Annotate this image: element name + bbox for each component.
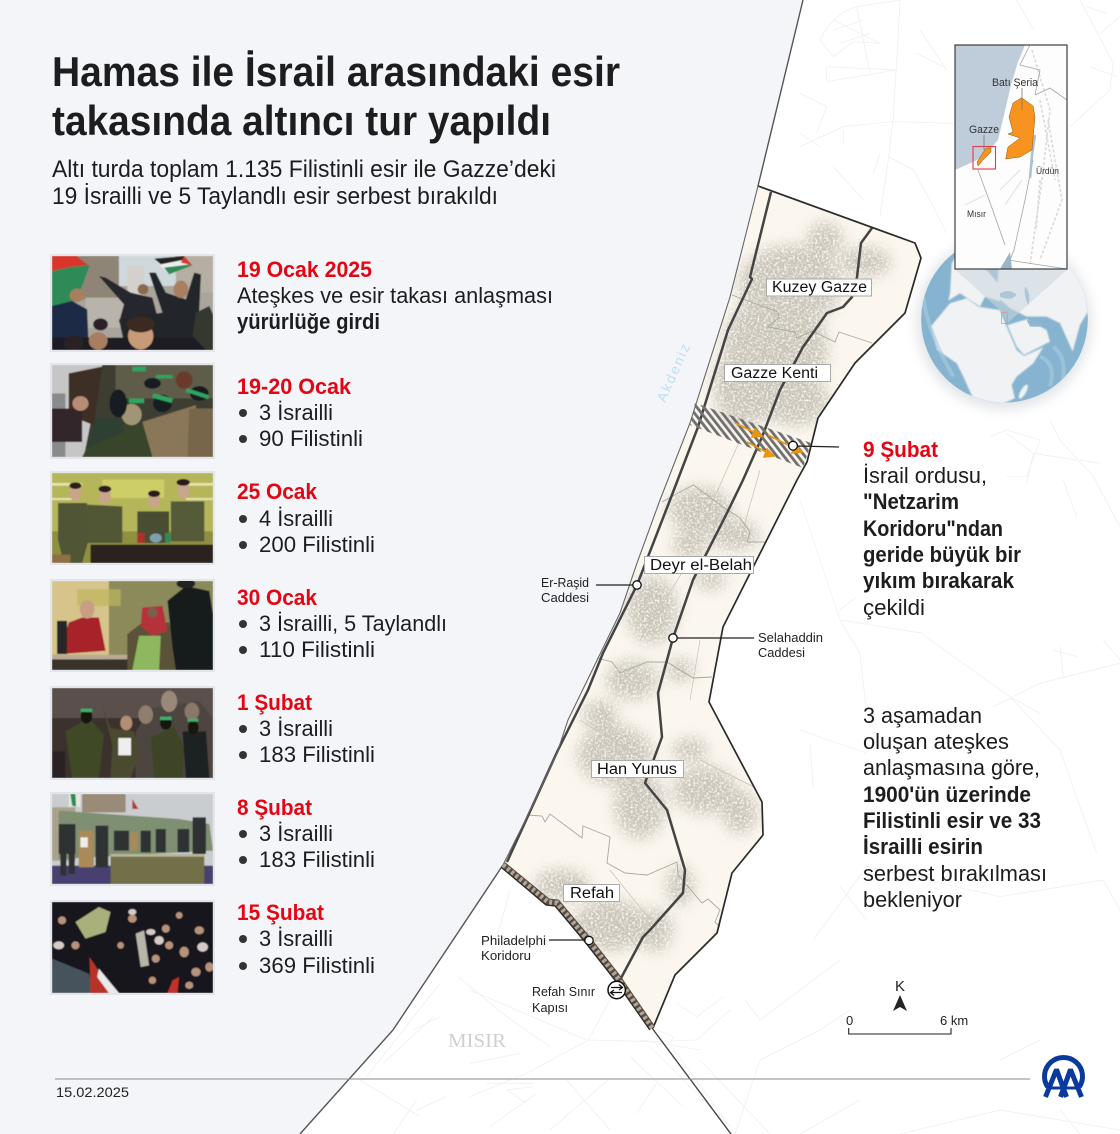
timeline: text 8 Şubat: 183 Filistinli [259, 847, 375, 872]
timeline: text 15 Şubat: 3 İsrailli [259, 926, 333, 951]
timeline: text 19-20 Ocak: 90 Filistinli [259, 426, 363, 451]
inset labels: Gazze [969, 124, 999, 136]
footer rule [55, 1078, 1030, 1080]
inset Gaza [977, 148, 991, 166]
timeline: text 19-20 Ocak: 3 İsrailli [259, 400, 333, 425]
background road network [360, 0, 1120, 1134]
scale bar: 0 [846, 1013, 853, 1028]
timeline: text 19 Ocak 2025: Ateşkes ve esir takası anlaşması [237, 283, 553, 308]
globe locator [917, 235, 1091, 409]
timeline: text 19 Ocak 2025 [237, 257, 553, 334]
scale bar [846, 1013, 968, 1034]
timeline: photo 1 Şubat [50, 686, 215, 780]
timeline: photo 19 Ocak [50, 254, 215, 352]
timeline: text 15 Şubat: 369 Filistinli [259, 953, 375, 978]
timeline: text 19-20 Ocak [237, 374, 363, 451]
timeline: photo 19-20 Ocak [50, 363, 215, 459]
inset labels: Ürdün [1036, 166, 1059, 176]
inset map [955, 45, 1067, 269]
timeline: text 15 Şubat [237, 900, 375, 978]
text block: agreement: bekleniyor [863, 887, 962, 912]
title: Hamas ile İsrail arasındaki esir [52, 48, 620, 95]
text block: agreement: 3 aşamadan [863, 703, 982, 728]
subtitle: Altı turda toplam 1.135 Filistinli esir ile Gazze’deki [52, 156, 556, 183]
callout: Er-Raşid Caddesi [541, 575, 641, 605]
timeline: text 19-20 Ocak: 19-20 Ocak [237, 374, 352, 399]
title: takasında altıncı tur yapıldı [52, 97, 551, 144]
callout: Er-Raşid Caddesi: Caddesi [541, 590, 589, 605]
text block: 9 Şubat: Koridoru"ndan [863, 516, 1003, 541]
callout: Selahaddin Caddesi: Selahaddin [758, 630, 823, 645]
subtitle: 19 İsrailli ve 5 Taylandlı esir serbest bırakıldı [52, 183, 498, 210]
timeline: text 1 Şubat: 3 İsrailli [259, 716, 333, 741]
text block: 9 Şubat: çekildi [863, 595, 925, 620]
timeline: text 15 Şubat: 15 Şubat [237, 900, 325, 925]
timeline: text 30 Ocak: 3 İsrailli, 5 Taylandlı [259, 611, 447, 636]
text block: agreement [863, 703, 1047, 912]
subtitle [52, 156, 556, 210]
callout: Selahaddin Caddesi [669, 630, 823, 660]
inset labels [967, 77, 1059, 219]
label: MISIR: MISIR [448, 1030, 507, 1052]
text block: agreement: 1900'ün üzerinde [863, 782, 1031, 807]
callout: Philadelphi Koridoru [481, 933, 593, 963]
scale bar: 6 km [940, 1013, 968, 1028]
timeline: text 25 Ocak [237, 479, 375, 557]
Selahaddin road [620, 228, 872, 980]
map label: Kuzey Gazze: Kuzey Gazze [772, 279, 867, 296]
north arrow: K [895, 978, 905, 995]
timeline: text 30 Ocak [237, 585, 447, 662]
timeline: text 30 Ocak: 110 Filistinli [259, 637, 375, 662]
text block: agreement: Filistinli esir ve 33 [863, 808, 1041, 833]
inset sea [955, 45, 1025, 170]
inset labels: Mısır [967, 209, 986, 219]
text block: 9 Şubat [863, 437, 1021, 620]
map: Gaza Strip [501, 186, 921, 1134]
timeline: text 25 Ocak: 25 Ocak [237, 479, 318, 504]
icon: border crossing [608, 981, 625, 999]
timeline: photo 25 Ocak [50, 471, 215, 565]
text block: 9 Şubat: yıkım bırakarak [863, 568, 1015, 593]
title [52, 48, 620, 144]
date: 15.02.2025 [56, 1084, 129, 1100]
text block: 9 Şubat: İsrail ordusu, [863, 463, 987, 488]
map label: Refah: Refah [570, 885, 614, 902]
timeline: text 1 Şubat [237, 690, 375, 767]
sea area and Egyptian coastline [0, 0, 803, 1134]
inset West Bank [1006, 98, 1035, 159]
label: Akdeniz: Akdeniz [653, 339, 694, 404]
timeline: photo 8 Şubat [50, 792, 215, 886]
callout: Philadelphi Koridoru: Philadelphi [481, 933, 546, 948]
callout: Selahaddin Caddesi: Caddesi [758, 645, 805, 660]
globe land [922, 257, 1088, 402]
text block: 9 Şubat: geride büyük bir [863, 542, 1021, 567]
callout: Refah Sınır Kapısı: Kapısı [532, 1000, 568, 1015]
Er-Raşid road [507, 192, 771, 862]
timeline: text 8 Şubat [237, 795, 375, 872]
callout: Er-Raşid Caddesi: Er-Raşid [541, 575, 589, 590]
logo: AA [1045, 1057, 1082, 1097]
text block: 9 Şubat: 9 Şubat [863, 437, 939, 462]
timeline: text 8 Şubat: 3 İsrailli [259, 821, 333, 846]
text block: agreement: anlaşmasına göre, [863, 755, 1040, 780]
timeline: photo 15 Şubat [50, 900, 215, 995]
text block: agreement: oluşan ateşkes [863, 729, 1009, 754]
Philadelphi corridor [501, 865, 652, 1030]
Egypt-Israel border line [652, 1028, 731, 1134]
timeline: text 30 Ocak: 30 Ocak [237, 585, 318, 610]
callout: Refah Sınır Kapısı [532, 984, 596, 1015]
timeline: text 1 Şubat: 183 Filistinli [259, 742, 375, 767]
orange arrows: withdrawal [735, 423, 802, 457]
urban areas [534, 222, 891, 952]
governorate boundaries [528, 295, 872, 927]
timeline: text 19 Ocak 2025: yürürlüğe girdi [237, 309, 380, 334]
north arrow [893, 978, 907, 1011]
text block: 9 Şubat: "Netzarim [863, 489, 959, 514]
map label: Deyr el-Belah: Deyr el-Belah [650, 557, 752, 574]
map label: Han Yunus: Han Yunus [597, 761, 677, 778]
inset labels: Batı Şeria [992, 77, 1039, 89]
strip land area [503, 186, 921, 1028]
view wedge [955, 269, 1068, 323]
strip outline [653, 186, 921, 1028]
timeline: text 19 Ocak 2025: 19 Ocak 2025 [237, 257, 372, 282]
Netzarim corridor hatching [690, 403, 811, 468]
timeline: text 1 Şubat: 1 Şubat [237, 690, 313, 715]
map label: Gazze Kenti: Gazze Kenti [731, 365, 818, 382]
timeline: text 25 Ocak: 4 İsrailli [259, 506, 333, 531]
timeline: photo 30 Ocak [50, 579, 215, 672]
callout line: Netzarim [789, 441, 839, 450]
text block: agreement: serbest bırakılması [863, 861, 1047, 886]
callout: Refah Sınır Kapısı: Refah Sınır [532, 984, 596, 999]
callout: Philadelphi Koridoru: Koridoru [481, 948, 531, 963]
timeline: text 8 Şubat: 8 Şubat [237, 795, 313, 820]
text block: agreement: İsrailli esirin [863, 834, 983, 859]
timeline: text 25 Ocak: 200 Filistinli [259, 532, 375, 557]
